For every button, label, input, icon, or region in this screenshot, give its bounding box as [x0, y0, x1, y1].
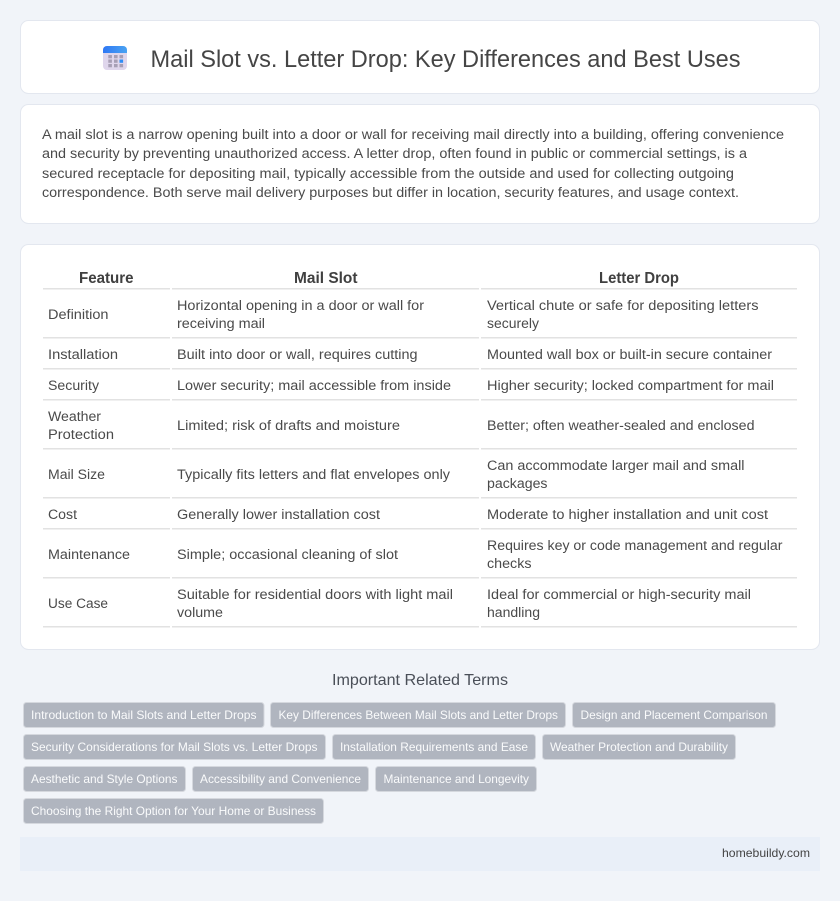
heading: important related terms: Important Related Terms: [332, 672, 508, 689]
icon: calendar grid: [103, 46, 127, 70]
row: weather protection: Better; often weather-sealed and enclosed: [487, 418, 754, 434]
footer: homebuildy.com: [722, 846, 810, 860]
related terms tags: Key Differences Between Mail Slots and Letter Drops: [278, 708, 558, 722]
row: mail size: [48, 458, 744, 492]
related terms tags: Aesthetic and Style Options: [31, 772, 178, 786]
row: mail size: packages: [487, 476, 548, 492]
panel: introduction paragraph: A mail slot is a narrow opening built into a door or wall for receiving mail directly into a building, offering convenience: [42, 127, 784, 143]
row: definition: [48, 298, 758, 332]
related terms tags: Choosing the Right Option for Your Home or Business: [31, 804, 316, 818]
row: weather protection: Limited; risk of drafts and moisture: [177, 418, 400, 434]
panel: title header: [20, 20, 820, 94]
row: mail size: Can accommodate larger mail and small: [487, 458, 744, 474]
related terms tags: Introduction to Mail Slots and Letter Drops: [31, 708, 256, 722]
row: installation: [48, 347, 772, 363]
related terms tags: Accessibility and Convenience: [200, 772, 361, 786]
row: use case: [48, 587, 751, 621]
row: use case: volume: [177, 605, 223, 621]
row: definition: securely: [487, 316, 540, 332]
row: use case: Use Case: [48, 596, 108, 612]
table header row: [79, 270, 679, 287]
related terms tags: Maintenance and Longevity: [384, 772, 529, 786]
related terms tags: Security Considerations for Mail Slots vs. Letter Drops: [31, 740, 318, 754]
row: cost: Cost: [48, 507, 77, 523]
row: mail size: Typically fits letters and flat envelopes only: [177, 467, 451, 483]
related terms tags: Installation Requirements and Ease: [340, 740, 528, 754]
row: definition: Definition: [48, 307, 108, 323]
row: maintenance: checks: [487, 556, 532, 572]
row: installation: Mounted wall box or built-in secure container: [487, 347, 772, 363]
related terms tags: Weather Protection and Durability: [550, 740, 728, 754]
row: security: Security: [48, 378, 100, 394]
row: use case: handling: [487, 605, 540, 621]
row: weather protection: [48, 409, 754, 443]
row: maintenance: Simple; occasional cleaning of slot: [177, 547, 398, 563]
row: cost: Generally lower installation cost: [177, 507, 380, 523]
footer: [20, 837, 820, 871]
row: installation: Built into door or wall, requires cutting: [177, 347, 418, 363]
related terms tags: [24, 702, 776, 824]
row: security: Lower security; mail accessible from inside: [177, 378, 451, 394]
panel: introduction paragraph: and security by preventing unauthorized access. A letter drop, often found in public or commercial settings, is a: [42, 146, 747, 162]
row: definition: receiving mail: [177, 316, 265, 332]
row: definition: Vertical chute or safe for depositing letters: [487, 298, 758, 314]
panel: introduction paragraph: secured receptacle for depositing mail, typically accessible from the outside and used for collecting outgoing: [42, 166, 734, 182]
row: mail size: Mail Size: [48, 467, 105, 483]
row: security: Higher security; locked compartment for mail: [487, 378, 774, 394]
panel: comparison table: [20, 244, 820, 650]
related terms tags: Design and Placement Comparison: [580, 708, 768, 722]
row: definition: Horizontal opening in a door or wall for: [177, 298, 424, 314]
row: cost: [48, 507, 768, 523]
row: use case: Suitable for residential doors with light mail: [177, 587, 453, 603]
row: weather protection: Weather: [48, 409, 101, 425]
table header row: Mail Slot: [294, 270, 358, 287]
title: Mail Slot vs. Letter Drop: Key Differences and Best Uses: [150, 46, 740, 73]
panel: introduction paragraph: correspondence. Both serve mail delivery purposes but differ in location, security features, and usage context.: [42, 185, 739, 201]
panel: introduction paragraph: [20, 104, 820, 224]
table header row: Feature: [79, 270, 134, 287]
row: use case: Ideal for commercial or high-security mail: [487, 587, 751, 603]
row: installation: Installation: [48, 347, 118, 363]
row: maintenance: [48, 538, 783, 572]
row: cost: Moderate to higher installation and unit cost: [487, 507, 768, 523]
row: maintenance: Requires key or code management and regular: [487, 538, 783, 554]
table header row: Letter Drop: [599, 270, 679, 287]
row: weather protection: Protection: [48, 427, 114, 443]
row: security: [48, 378, 774, 394]
row: maintenance: Maintenance: [48, 547, 130, 563]
